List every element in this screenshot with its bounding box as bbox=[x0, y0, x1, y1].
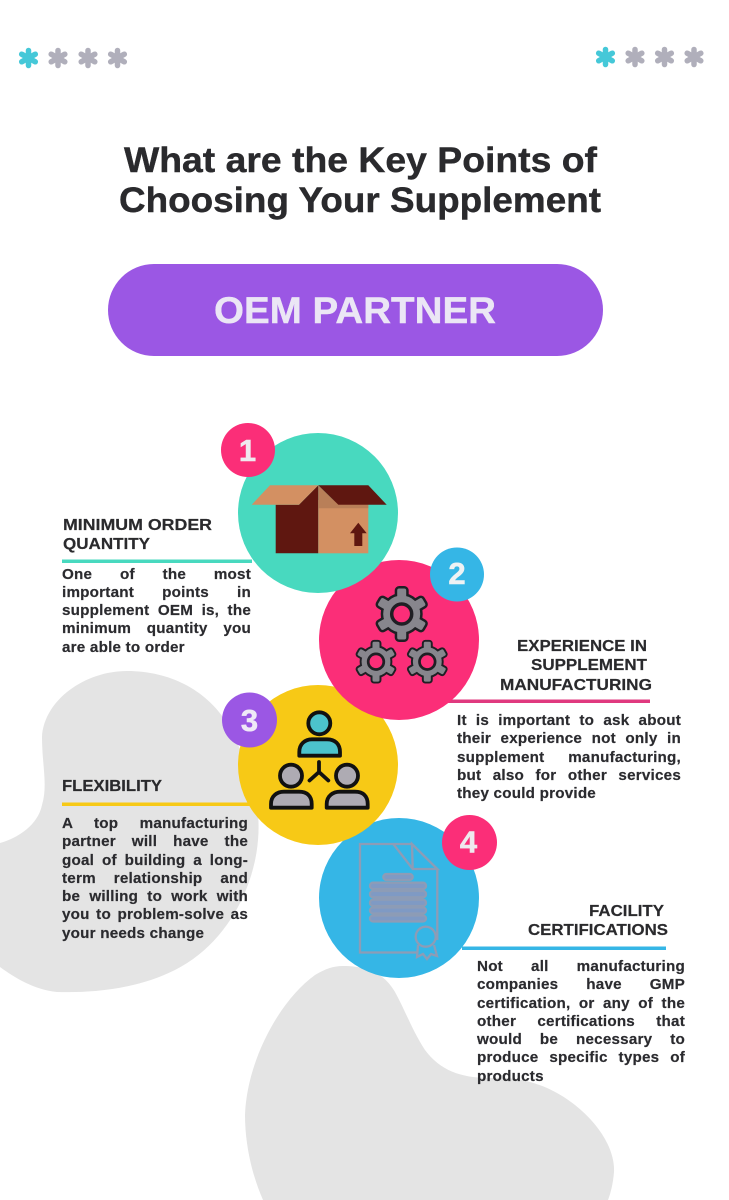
text: flexibility: be willing to work with bbox=[62, 888, 248, 905]
heading: minimum order quantity bbox=[63, 517, 212, 553]
text: flexibility: A top manufacturing bbox=[62, 815, 248, 832]
badge 3: 3 bbox=[241, 703, 258, 738]
text: facility certifications: certification, or any of the bbox=[477, 994, 685, 1012]
badge 2: 2 bbox=[448, 556, 466, 591]
text: minimum order quantity: are able to order bbox=[62, 638, 185, 656]
decoration: asterisks top left bbox=[22, 50, 124, 66]
heading: facility certifications: CERTIFICATIONS bbox=[528, 922, 668, 939]
heading: facility certifications: FACILITY bbox=[589, 903, 664, 920]
blob: left background bbox=[0, 671, 259, 992]
rule: certifications bbox=[462, 946, 666, 950]
text: minimum order quantity: important points in bbox=[62, 584, 251, 601]
text: experience bbox=[457, 712, 681, 802]
title: Choosing Your Supplement bbox=[119, 181, 601, 220]
rule: experience bbox=[445, 700, 650, 703]
text: flexibility bbox=[62, 815, 248, 942]
text: facility certifications: companies have GMP bbox=[477, 976, 685, 993]
text: flexibility: term relationship and bbox=[62, 870, 248, 887]
text: minimum order quantity: One of the most bbox=[62, 566, 251, 582]
heading: minimum order quantity: MINIMUM ORDER bbox=[63, 517, 212, 534]
text: minimum order quantity: supplement OEM is, the bbox=[62, 602, 251, 619]
decoration: asterisks top right bbox=[599, 50, 701, 64]
icon: certificate bbox=[360, 844, 437, 959]
badge 1 bbox=[221, 423, 275, 477]
circle 3: flexibility bbox=[238, 685, 398, 845]
icon: gears bbox=[357, 588, 446, 682]
text: flexibility: your needs change bbox=[62, 924, 204, 942]
badge 1: 1 bbox=[239, 433, 256, 468]
badge 3 bbox=[222, 692, 277, 748]
text: experience: supplement manufacturing, bbox=[457, 748, 681, 766]
heading: experience in supplement manufacturing: EXPERIENCE IN bbox=[517, 638, 647, 655]
icon: team bbox=[271, 712, 368, 808]
banner: OEM partner: OEM PARTNER bbox=[214, 290, 496, 331]
text: flexibility: you to problem-solve as bbox=[62, 906, 248, 923]
text: experience: It is important to ask about bbox=[457, 712, 681, 729]
rule: flexibility bbox=[62, 802, 252, 806]
text: experience: they could provide bbox=[457, 785, 596, 802]
banner: OEM partner bbox=[108, 264, 603, 356]
heading: experience in supplement manufacturing: MANUFACTURING bbox=[500, 677, 652, 694]
text: flexibility: partner will have the bbox=[62, 833, 248, 850]
badge 4: 4 bbox=[460, 824, 478, 860]
text: flexibility: goal of building a long- bbox=[62, 852, 248, 868]
badge 2 bbox=[430, 548, 484, 602]
text: facility certifications: other certifications that bbox=[477, 1013, 685, 1030]
icon: box bbox=[252, 485, 387, 553]
badge 4 bbox=[442, 815, 497, 870]
heading: experience in supplement manufacturing: SUPPLEMENT bbox=[531, 657, 647, 674]
text: facility certifications: products bbox=[477, 1068, 544, 1084]
text: experience: but also for other services bbox=[457, 767, 681, 784]
heading: experience in supplement manufacturing bbox=[500, 638, 652, 694]
title bbox=[119, 141, 601, 220]
title: What are the Key Points of bbox=[124, 141, 597, 180]
text: facility certifications bbox=[476, 958, 685, 1084]
heading: minimum order quantity: QUANTITY bbox=[63, 536, 150, 553]
text: minimum order quantity: minimum quantity you bbox=[62, 620, 251, 637]
text: facility certifications: produce specific types of bbox=[477, 1049, 685, 1066]
heading: flexibility: FLEXIBILITY bbox=[62, 778, 162, 795]
text: minimum order quantity bbox=[62, 566, 251, 656]
circle 4: certifications bbox=[319, 818, 479, 978]
text: experience: their experience not only in bbox=[457, 730, 681, 747]
blob: bottom background bbox=[245, 966, 614, 1200]
rule: minimum order quantity bbox=[62, 560, 252, 563]
heading: facility certifications bbox=[528, 903, 668, 939]
text: facility certifications: would be necessary to bbox=[477, 1031, 685, 1048]
text: facility certifications: Not all manufacturing bbox=[477, 958, 685, 975]
circle 2: experience bbox=[319, 560, 479, 720]
circle 1: minimum order bbox=[238, 433, 398, 593]
